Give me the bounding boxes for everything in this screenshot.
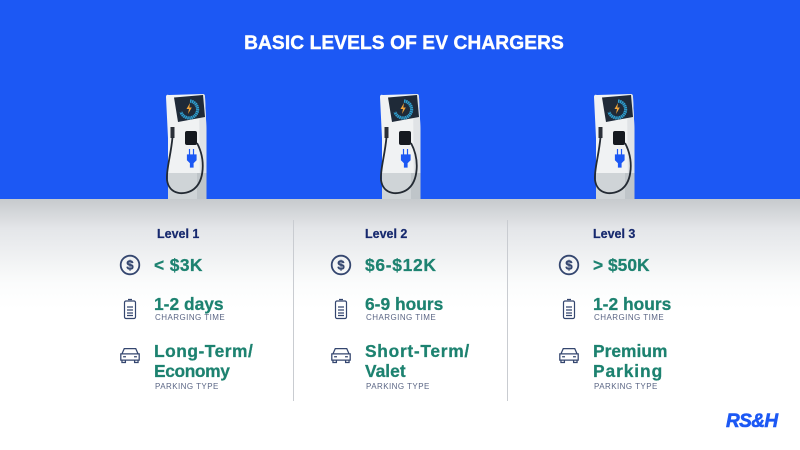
cost 2: $6-$12K — [365, 255, 437, 275]
time 1: 1-2 days — [154, 294, 224, 314]
charger 3 — [594, 94, 634, 199]
charger 2 — [380, 94, 420, 199]
icon: dollar 3 — [560, 256, 578, 274]
icon: dollar 2 — [332, 256, 350, 274]
logo: RS&H — [726, 411, 777, 432]
parking 2 — [365, 341, 470, 381]
parking 2: Valet — [365, 361, 406, 381]
time 3: 1-2 hours — [593, 294, 671, 314]
parking 3: Premium — [593, 341, 667, 361]
icon: car 3 — [560, 349, 578, 362]
charger 1 — [166, 94, 206, 199]
parking label 1: PARKING TYPE — [155, 382, 219, 391]
parking 1: Economy — [154, 361, 229, 381]
level 2: Level 2 — [365, 227, 407, 241]
level 3: Level 3 — [593, 227, 635, 241]
icon: battery 3 — [564, 300, 574, 318]
charging label 1: CHARGING TIME — [155, 313, 225, 322]
icon: dollar 1 — [121, 256, 139, 274]
charging label 2: CHARGING TIME — [366, 313, 436, 322]
parking 1 — [154, 341, 253, 381]
time 2: 6-9 hours — [365, 294, 443, 314]
grey fading floor — [0, 199, 800, 450]
icon: battery 2 — [336, 300, 346, 318]
level 1: Level 1 — [157, 227, 199, 241]
parking label 2: PARKING TYPE — [366, 382, 430, 391]
cost 3: > $50K — [593, 255, 650, 275]
parking 1: Long-Term/ — [154, 341, 253, 361]
column 3 text — [593, 227, 671, 391]
parking 3: Parking — [593, 361, 663, 381]
icon: car 2 — [332, 349, 350, 362]
icon: car 1 — [121, 349, 139, 362]
parking label 3: PARKING TYPE — [594, 382, 658, 391]
parking 2: Short-Term/ — [365, 341, 470, 361]
parking 3 — [593, 341, 667, 381]
icon: battery 1 — [124, 300, 136, 318]
title: BASIC LEVELS OF EV CHARGERS — [244, 33, 564, 54]
column 2 text — [365, 227, 470, 391]
blue header background — [0, 0, 800, 199]
charging label 3: CHARGING TIME — [594, 313, 664, 322]
column 1 text — [154, 227, 253, 391]
cost 1: < $3K — [154, 255, 203, 275]
